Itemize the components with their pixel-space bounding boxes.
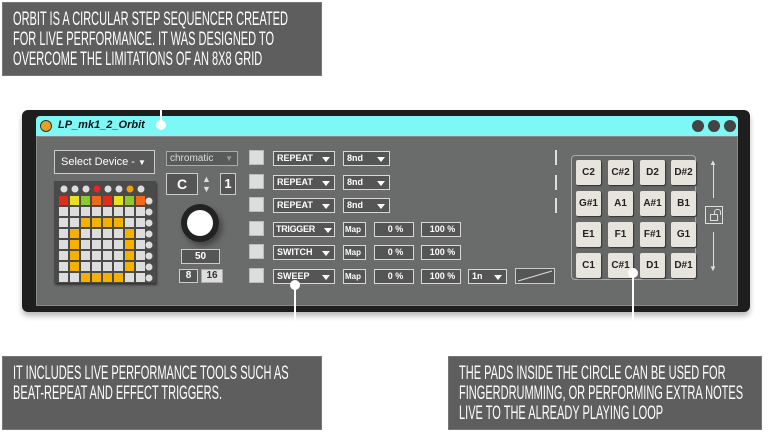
effect rows: TRIGGER bbox=[276, 224, 315, 234]
caption: bottom right: FINGERDRUMMING, OR PERFORMING EXTRA NOTES bbox=[459, 383, 743, 404]
caption: bottom left: BEAT-REPEAT AND EFFECT TRIGGERS. bbox=[13, 383, 222, 404]
caption: bottom right: THE PADS INSIDE THE CIRCLE CAN BE USED FOR bbox=[459, 363, 726, 384]
effect rows: 8nd bbox=[347, 177, 363, 187]
caption: bottom left bbox=[2, 356, 322, 430]
pad grid: B1 bbox=[677, 198, 690, 209]
effect rows: 8nd bbox=[347, 153, 363, 163]
effect rows: Map bbox=[345, 225, 361, 234]
effect rows bbox=[249, 150, 557, 284]
effect rows: 0 % bbox=[388, 271, 403, 281]
effect rows: REPEAT bbox=[277, 153, 313, 163]
knob bbox=[181, 204, 219, 242]
arrows and lock bbox=[705, 158, 723, 273]
pad grid: F1 bbox=[615, 229, 626, 240]
select device: Select Device - ▼ bbox=[61, 156, 146, 168]
icons: window buttons bbox=[692, 120, 736, 132]
step buttons 8 / 16: 16 bbox=[206, 270, 218, 281]
key selector: ▲ bbox=[202, 174, 211, 184]
panel: device frame bbox=[22, 110, 750, 312]
heading: device name: LP_mk1_2_Orbit bbox=[58, 119, 145, 131]
caption: top: OVERCOME THE LIMITATIONS OF AN 8X8 GRID bbox=[13, 49, 262, 70]
arrows and lock: ▼ bbox=[709, 264, 717, 273]
caption: bottom right: LIVE TO THE ALREADY PLAYING LOOP bbox=[459, 403, 663, 424]
effect rows: SWITCH bbox=[277, 247, 312, 257]
caption: top: ORBIT IS A CIRCULAR STEP SEQUENCER CREATED bbox=[13, 9, 288, 30]
effect rows: REPEAT bbox=[277, 177, 313, 187]
pad grid: C#2 bbox=[611, 167, 630, 178]
effect rows: 8nd bbox=[347, 200, 363, 210]
icon: logo bbox=[40, 120, 52, 132]
effect rows: Map bbox=[345, 272, 361, 281]
pad grid: G1 bbox=[677, 229, 690, 240]
chromatic dropdown bbox=[166, 151, 238, 166]
caption: bottom left: IT INCLUDES LIVE PERFORMANCE TOOLS SUCH AS bbox=[13, 363, 289, 384]
caption: bottom right bbox=[448, 356, 762, 430]
pad grid: C1 bbox=[582, 260, 595, 271]
connector: bottom right bbox=[628, 268, 638, 319]
key selector: ▼ bbox=[202, 184, 211, 194]
caption: top bbox=[2, 2, 322, 76]
step buttons 8 / 16: 8 bbox=[186, 270, 191, 281]
connector: top bbox=[156, 110, 166, 130]
chromatic dropdown: ▼ bbox=[225, 154, 233, 163]
pad grid: D2 bbox=[646, 167, 659, 178]
pad grid: D1 bbox=[646, 260, 659, 271]
key selector: C bbox=[177, 176, 187, 192]
value 50 bbox=[181, 249, 220, 264]
step buttons 8 / 16 bbox=[179, 269, 223, 283]
value 50: 50 bbox=[195, 251, 206, 262]
pad grid: E1 bbox=[582, 229, 595, 240]
effect rows: 100 % bbox=[430, 224, 455, 234]
pad grid: D#1 bbox=[674, 260, 693, 271]
body bbox=[36, 136, 738, 306]
pad grid: G#1 bbox=[579, 198, 598, 209]
launchpad grid bbox=[54, 181, 156, 283]
pad grid bbox=[571, 155, 696, 280]
connector: bottom left bbox=[290, 280, 300, 319]
effect rows: Map bbox=[345, 248, 361, 257]
pad grid: A1 bbox=[614, 198, 627, 209]
select device bbox=[54, 150, 155, 174]
effect rows: 100 % bbox=[430, 271, 455, 281]
caption: top: FOR LIVE PERFORMANCE. IT WAS DESIGNED TO bbox=[13, 29, 274, 50]
pad grid: C#1 bbox=[611, 260, 630, 271]
pad grid: A#1 bbox=[643, 198, 662, 209]
effect rows: 0 % bbox=[388, 224, 403, 234]
pad grid: C2 bbox=[582, 167, 595, 178]
effect rows: 100 % bbox=[430, 247, 455, 257]
title bar bbox=[36, 116, 738, 136]
key selector: 1 bbox=[224, 176, 232, 191]
key selector bbox=[166, 173, 236, 195]
effect rows: REPEAT bbox=[277, 200, 313, 210]
chromatic dropdown: chromatic bbox=[170, 153, 213, 164]
effect rows: 1n bbox=[472, 271, 483, 281]
effect rows: 0 % bbox=[388, 247, 403, 257]
pad grid: D#2 bbox=[674, 167, 693, 178]
arrows and lock: ▲ bbox=[709, 158, 717, 167]
effect rows: SWEEP bbox=[277, 271, 310, 281]
pad grid: F#1 bbox=[644, 229, 661, 240]
